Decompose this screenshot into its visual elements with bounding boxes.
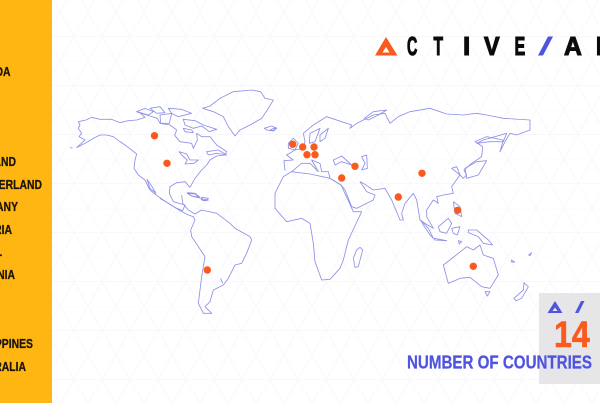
icon: small slash (575, 301, 584, 313)
africa (275, 172, 362, 280)
country names (0, 65, 42, 374)
panel: country count (539, 293, 600, 384)
number: 14: 14 (554, 315, 590, 356)
icon: logo slash (538, 36, 553, 56)
australia and oceania outline (421, 202, 532, 301)
eurasia and africa outline (270, 108, 530, 280)
panel: country list sidebar (0, 0, 52, 403)
logo letters: V (484, 33, 500, 61)
south america outline (160, 193, 252, 313)
logo letters (407, 31, 600, 61)
icon: logo triangle (375, 37, 398, 56)
logo letters: I (463, 31, 470, 61)
logo: Active wordmark (375, 31, 600, 61)
north america outline (70, 90, 277, 211)
icon: small triangle (548, 301, 562, 313)
logo letters: C (407, 33, 417, 61)
greenland (203, 90, 273, 136)
iceland (264, 126, 277, 131)
world map (70, 90, 532, 313)
logo letters: T (434, 32, 443, 61)
madagascar (353, 247, 363, 267)
logo letters: E (514, 31, 525, 61)
logo letters: A (564, 32, 582, 61)
location markers (151, 132, 477, 274)
